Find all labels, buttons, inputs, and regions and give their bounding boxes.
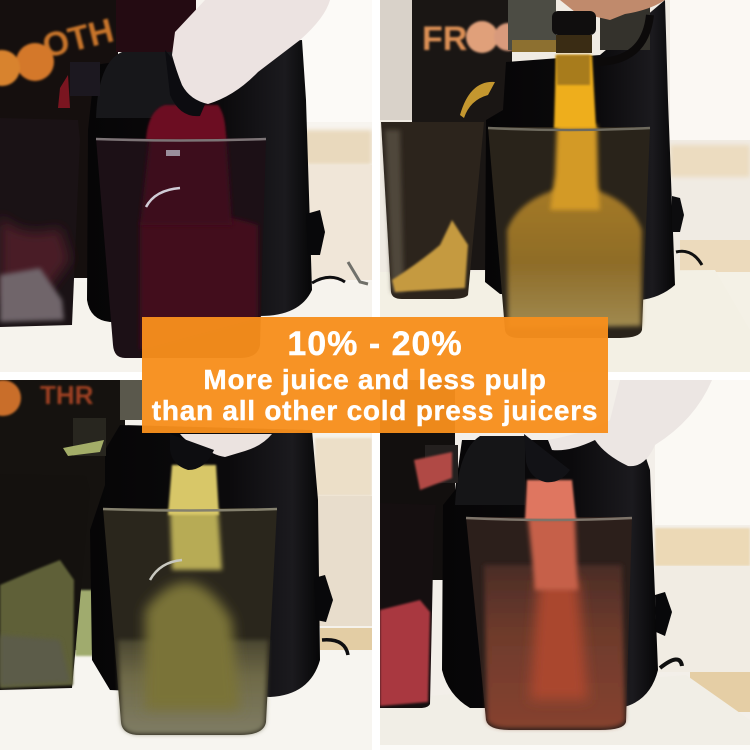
photo: watermelon juice, bottom right <box>380 380 750 750</box>
juicer <box>87 40 312 322</box>
spout <box>177 440 214 470</box>
main jar <box>466 517 632 730</box>
left jar <box>0 588 81 690</box>
glove <box>172 0 330 104</box>
photo: green juice, bottom left: THR <box>40 380 94 410</box>
photo: beetroot juice, top left <box>0 0 372 372</box>
left jar <box>0 278 74 327</box>
banner subtext: More juice and less pulp <box>203 364 547 395</box>
photo: beetroot juice, top left: OTH <box>39 12 118 66</box>
glove <box>180 434 272 457</box>
photo: green juice, bottom left <box>0 380 372 750</box>
banner subtext: than all other cold press juicers <box>152 395 598 426</box>
juicer <box>90 425 320 697</box>
left jar <box>381 122 484 299</box>
left jar <box>380 580 433 708</box>
main jar <box>103 508 277 735</box>
banner subtext <box>152 364 598 426</box>
photo: mango juice, top right: FR <box>422 20 467 58</box>
photo: mango juice, top right <box>380 0 750 372</box>
juicer <box>442 440 658 708</box>
juicer <box>485 0 675 300</box>
glove <box>548 380 712 466</box>
spout <box>165 50 206 116</box>
main jar <box>488 127 650 338</box>
banner headline: 10% - 20% <box>287 325 463 363</box>
spout <box>524 434 570 482</box>
banner <box>142 317 608 433</box>
main jar <box>96 138 266 358</box>
